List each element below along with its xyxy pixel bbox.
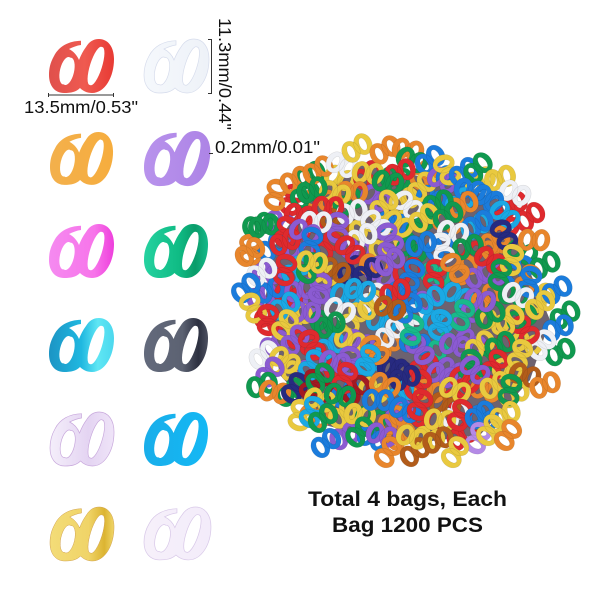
sequin: pale lilac	[50, 412, 114, 466]
sequin: green	[144, 224, 208, 278]
pile of mixed colour sequins	[226, 130, 585, 472]
thickness dimension: 0.2mm/0.01"	[215, 137, 320, 157]
height dimension: 11.3mm/0.44"	[215, 18, 235, 130]
sequin: dark grey	[144, 318, 208, 372]
sequin: teal blue	[49, 318, 114, 372]
caption: total quantity: Total 4 bags, Each	[308, 488, 507, 511]
width dimension: 13.5mm/0.53"	[24, 97, 138, 117]
sequin: orange	[50, 132, 113, 185]
sequin: pink	[49, 224, 114, 278]
sequin: purple	[144, 131, 210, 186]
sequin: red	[49, 39, 114, 93]
sequin: pale white	[144, 507, 211, 560]
sequin: sky blue	[144, 412, 208, 466]
caption: total quantity	[308, 488, 507, 537]
sequin: gold	[50, 507, 114, 561]
sequin: white	[144, 39, 209, 93]
caption: total quantity: Bag 1200 PCS	[332, 514, 483, 537]
